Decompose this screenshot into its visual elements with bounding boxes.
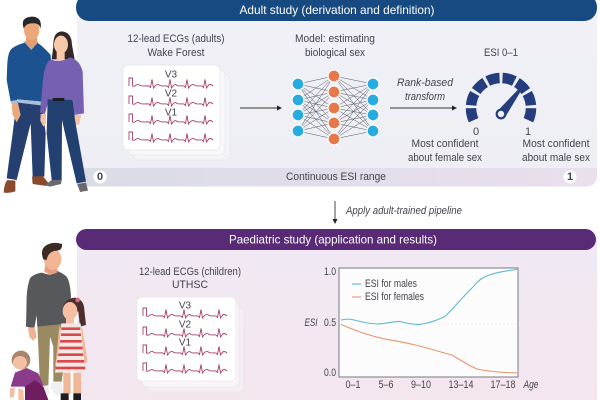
gauge label: 1, male [522,126,590,164]
text: child ECG title: UTHSC [172,279,208,291]
woman [40,31,88,192]
legend: ESI for females [365,291,424,303]
text: gauge title: ESI 0–1 [484,47,518,59]
arrow: apply pipeline [332,201,338,224]
line chart: ESI by age: ESI [304,317,318,329]
ECG cards: children: V1 [179,338,192,348]
text: adult ECG title: 12-lead ECGs (adults) [128,33,224,45]
neural network [292,70,379,145]
text: adult ECG title [128,33,224,59]
line chart: ESI by age: 1.0 [324,266,336,278]
text: child ECG title: 12-lead ECGs (children) [139,266,241,278]
arrow: ECG to model [240,106,282,110]
continuous ESI range bar: 0 [97,171,103,183]
line chart: ESI by age: 0.5 [324,317,336,329]
gauge label: 0, female: Most confident [412,138,478,150]
line chart: ESI by age: 9–10 [411,379,431,391]
male curve [341,270,517,324]
illustration: adult man and woman [4,17,88,193]
text: model title [295,33,375,59]
father [26,243,71,396]
heading: paediatric study: Paediatric study (application and results) [229,232,437,246]
gauge label: 1, male: about male sex [522,152,590,164]
ECG cards: adults [123,65,230,160]
gauge label: 0, female [408,126,482,164]
gauge label: 0, female: 0 [473,126,479,138]
legend [352,278,424,303]
heading: adult study: Adult study (derivation and definition) [240,3,434,17]
ECG cards: adults: V3 [165,70,178,80]
text: model title: Model: estimating [295,33,375,45]
girl [55,298,87,400]
ECG cards: children: V2 [179,320,192,330]
text: rank-based transform [397,77,454,103]
text: apply adult-trained pipeline: Apply adult-trained pipeline [345,205,462,217]
text: rank-based transform: transform [405,91,445,103]
panel: paediatric study [77,238,597,400]
ECG cards: children [137,297,244,392]
line chart: ESI by age: Age [523,379,538,391]
line chart: ESI by age: 13–14 [448,379,474,391]
gauge label: 1, male: Most confident [522,138,590,150]
female curve [341,324,517,373]
continuous ESI range bar: 1 [567,171,573,183]
text: rank-based transform: Rank-based [397,77,454,89]
ECG cards: children: V3 [179,300,192,312]
continuous ESI range bar [77,168,597,186]
legend: ESI for males [365,278,417,290]
illustration: father and two children [10,243,87,400]
ECG cards: adults: V1 [165,108,178,118]
toddler [10,351,48,400]
gauge label: 1, male: 1 [525,126,531,138]
continuous ESI range bar: Continuous ESI range [286,171,386,183]
line chart: ESI by age: 0.0 [324,367,336,379]
gauge [471,78,531,120]
heading: adult study [76,0,597,21]
ECG cards: adults: V2 [165,88,178,100]
line chart: ESI by age [304,266,538,391]
panel: adult study [77,8,597,187]
arrow: model to gauge [390,106,457,110]
line chart: ESI by age: 17–18 [490,379,516,391]
heading: paediatric study [76,229,596,250]
man [4,17,52,193]
line chart: ESI by age: 0–1 [346,379,360,391]
text: adult ECG title: Wake Forest [148,47,204,59]
text: child ECG title [139,266,241,291]
text: model title: biological sex [305,47,365,59]
gauge label: 0, female: about female sex [408,152,482,164]
line chart: ESI by age: 5–6 [378,379,394,391]
